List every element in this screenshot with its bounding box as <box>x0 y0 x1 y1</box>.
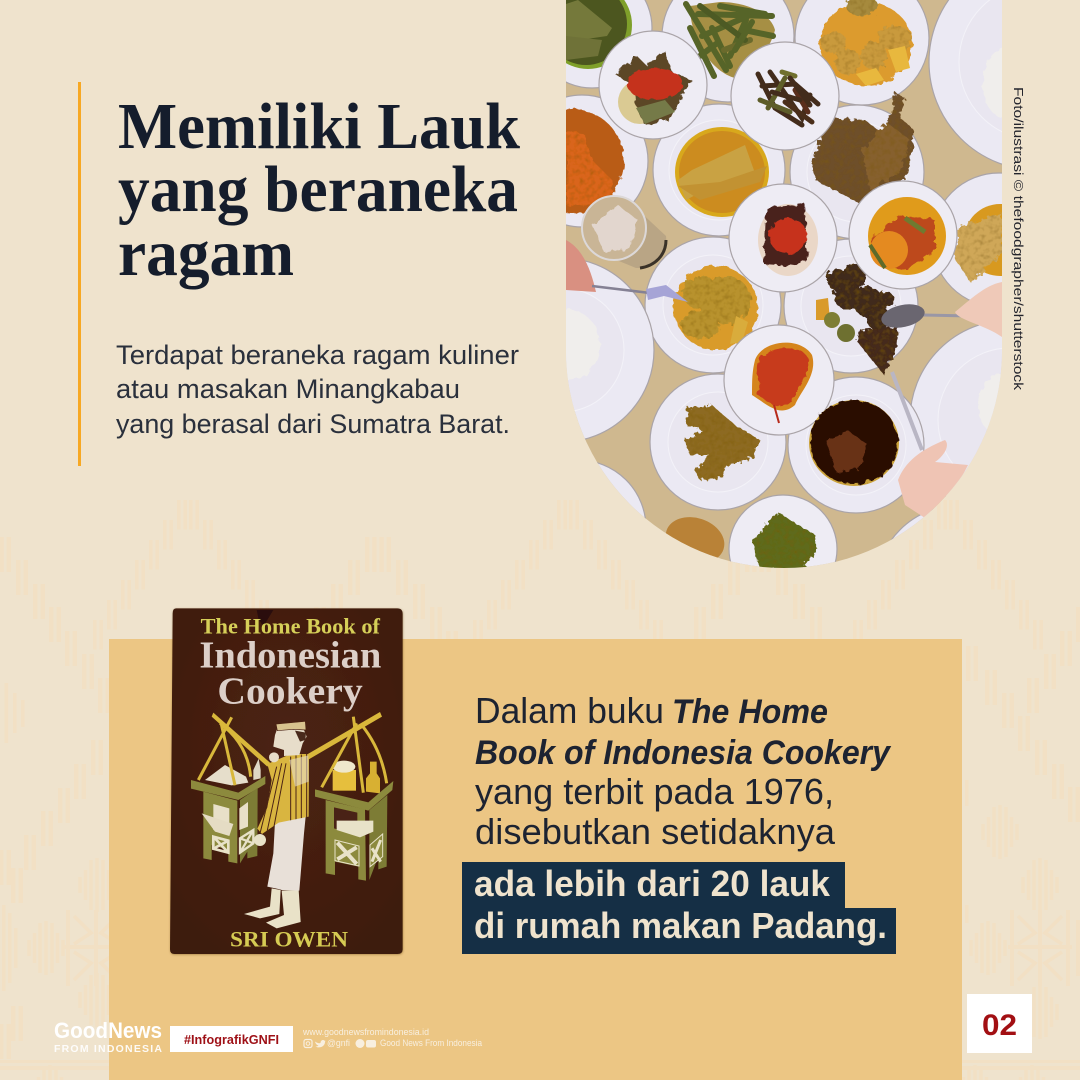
yellow curry <box>820 0 912 86</box>
fact paragraph: Dalam buku <box>475 690 664 731</box>
book author: SRI OWEN <box>230 927 349 952</box>
fact paragraph <box>475 690 892 852</box>
small sauce dish <box>666 517 724 558</box>
panel: book fact <box>109 639 962 1080</box>
footer links and social icons: @gnfi <box>327 1038 350 1049</box>
right cart <box>303 712 393 881</box>
sambal with eggplant <box>616 50 692 125</box>
title <box>118 90 520 290</box>
page number <box>967 994 1032 1053</box>
background: woven zigzag pattern <box>0 500 1080 1080</box>
title: ragam <box>118 217 294 290</box>
rendang plate <box>816 263 898 375</box>
hashtag badge: #InfografikGNFI <box>184 1032 279 1047</box>
dark gulai sauce <box>809 400 899 486</box>
highlight callout <box>462 862 896 954</box>
photo: Padang dishes on a table <box>566 0 1002 568</box>
book title: Cookery <box>217 670 363 712</box>
serving spoon and right hand <box>879 282 1002 337</box>
intro text <box>116 340 519 439</box>
book cover <box>170 608 403 954</box>
fact paragraph: disebutkan setidaknya <box>475 811 836 852</box>
beef with sambal <box>758 204 818 276</box>
page number: 02 <box>982 1009 1017 1042</box>
green chili sambal <box>752 512 818 570</box>
dry spiced rendang <box>684 405 760 480</box>
bowls <box>599 31 957 603</box>
cover board <box>170 608 403 954</box>
intro text: atau masakan Minangkabau <box>116 374 460 404</box>
book title: Indonesian <box>199 635 381 677</box>
plates <box>566 0 1002 540</box>
egg in orange sauce <box>868 197 946 275</box>
book title <box>199 613 381 712</box>
orange fish curry <box>566 108 625 214</box>
fact paragraph: yang terbit pada 1976, <box>475 771 834 812</box>
street vendor figure <box>244 721 309 928</box>
fact paragraph: Book of Indonesia Cookery <box>475 734 892 772</box>
title: yang beraneka <box>118 153 518 226</box>
accent vertical line <box>78 82 81 466</box>
iced drink glass <box>582 196 666 268</box>
fork and left hand <box>566 240 688 302</box>
hashtag badge <box>170 1026 293 1052</box>
logo: GoodNews From Indonesia: FROM INDONESIA <box>54 1043 162 1055</box>
second spoon and lower hand <box>892 372 968 518</box>
red sambal bowl <box>752 343 813 423</box>
footer links and social icons: Good News From Indonesia <box>380 1038 483 1049</box>
fried fish <box>812 92 913 204</box>
logo: GoodNews From Indonesia: GoodNews <box>54 1018 162 1043</box>
rice <box>536 49 1022 435</box>
fact paragraph: The Home <box>672 693 828 731</box>
chicken curry plate <box>674 266 758 350</box>
green curry <box>566 0 632 69</box>
title: Memiliki Lauk <box>118 90 520 163</box>
right plate yellow curry <box>954 204 1002 283</box>
photo credit: Foto/ilustrasi © thefoodgrapher/shutterstock <box>1011 87 1026 391</box>
highlight callout: ada lebih dari 20 lauk <box>474 863 831 904</box>
green beans <box>686 2 775 78</box>
yellow curry with fried piece <box>675 127 769 217</box>
plate inner rings <box>566 0 1002 496</box>
highlight callout: di rumah makan Padang. <box>474 905 887 946</box>
intro text: Terdapat beraneka ragam kuliner <box>116 340 519 370</box>
footer links and social icons: www.goodnewsfromindonesia.id <box>302 1027 429 1038</box>
footer links and social icons <box>302 1027 483 1049</box>
dried anchovy dish <box>758 72 818 125</box>
book title: The Home Book of <box>201 613 380 638</box>
intro text: yang berasal dari Sumatra Barat. <box>116 409 510 439</box>
left cart <box>191 713 270 863</box>
logo: GoodNews From Indonesia <box>54 1018 162 1055</box>
